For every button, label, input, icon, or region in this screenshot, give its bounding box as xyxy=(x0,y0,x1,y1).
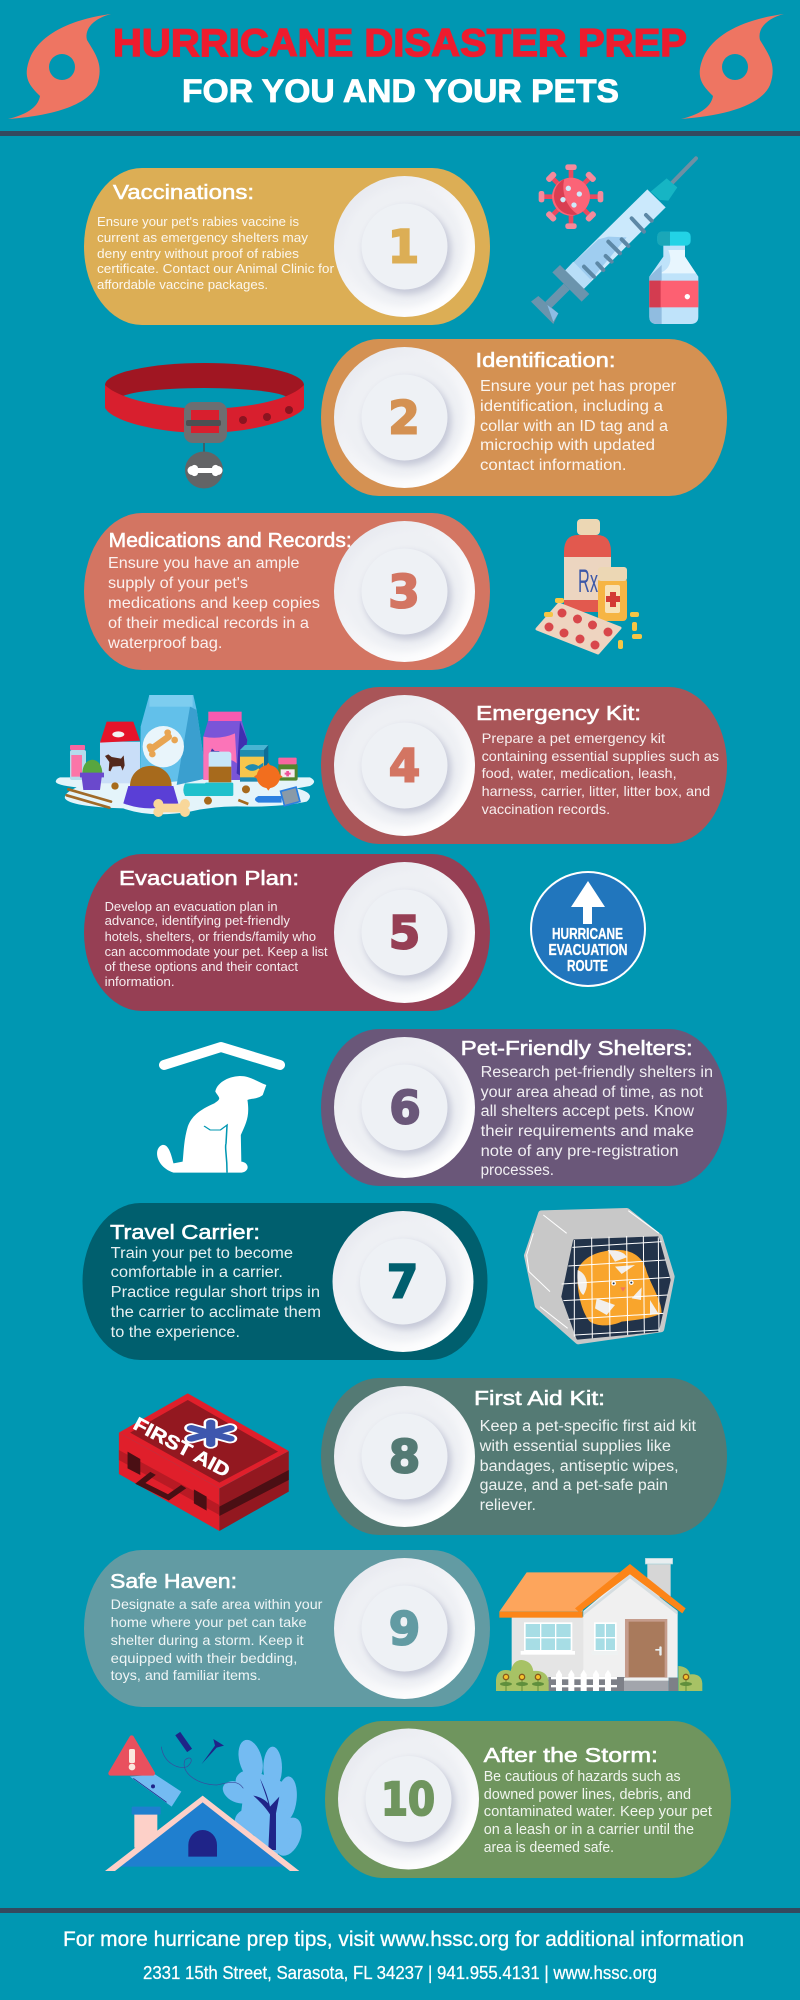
syringe xyxy=(672,158,696,183)
body text: downed power lines, debris, and xyxy=(484,1786,691,1803)
windows xyxy=(524,1622,572,1652)
heading: Travel Carrier: xyxy=(110,1222,260,1244)
body text: can accommodate your pet. Keep a list xyxy=(105,944,328,959)
body text: reliever. xyxy=(480,1497,536,1514)
grass pot xyxy=(82,760,102,774)
icon: hurricane evacuation route sign xyxy=(530,871,646,987)
body text: of their medical records in a xyxy=(108,615,309,632)
body text: information. xyxy=(105,974,175,989)
icon: hurricane left xyxy=(8,14,111,119)
icon: storm damaged house xyxy=(105,1732,307,1871)
body text: certificate. Contact our Animal Clinic for xyxy=(97,261,335,276)
body text: of these options and their contact xyxy=(105,959,298,974)
water bowls and dispenser xyxy=(183,783,207,796)
body text: Ensure your pet has proper xyxy=(480,378,676,395)
number 6: 6 xyxy=(389,1082,421,1134)
comb and plunger debris xyxy=(175,1732,192,1752)
icon: medicine bottles and pills: Rx xyxy=(578,563,598,599)
number 5: 5 xyxy=(389,906,420,960)
virus xyxy=(539,164,603,229)
wire xyxy=(161,1747,243,1788)
fence xyxy=(551,1670,617,1691)
icon: house xyxy=(496,1558,702,1691)
footer call to action: For more hurricane prep tips, visit www.hssc.org for additional information xyxy=(63,1928,744,1951)
sticks xyxy=(67,789,111,808)
panel: pet-friendly shelters xyxy=(321,1029,727,1186)
heading: Identification: xyxy=(476,350,616,372)
title: HURRICANE DISASTER PREP xyxy=(113,22,687,65)
number 10: 10 xyxy=(381,1773,435,1826)
panel: identification xyxy=(321,339,727,496)
body text: supply of your pet's xyxy=(108,575,248,592)
number 3: 3 xyxy=(388,566,420,618)
body text: equipped with their bedding, xyxy=(111,1650,297,1666)
body text xyxy=(482,730,719,817)
body text xyxy=(480,378,676,474)
body text: contaminated water. Keep your pet xyxy=(484,1803,713,1820)
body text xyxy=(97,214,335,292)
body text: harness, carrier, litter, litter box, and xyxy=(482,783,710,799)
body text: Ensure you have an ample xyxy=(108,555,300,572)
heading: Medications and Records: xyxy=(109,530,352,552)
heading: Evacuation Plan: xyxy=(119,868,299,890)
tree xyxy=(219,1737,307,1860)
food bowl xyxy=(130,766,172,788)
body text: containing essential supplies such as xyxy=(482,748,719,764)
body text xyxy=(107,555,320,652)
number 2: 2 xyxy=(388,392,420,444)
body text: deny entry without proof of rabies xyxy=(97,246,300,261)
body text: Keep a pet-specific first aid kit xyxy=(480,1418,697,1435)
roof xyxy=(120,1802,285,1867)
body text: Prepare a pet emergency kit xyxy=(482,730,665,746)
chimney xyxy=(134,1814,157,1848)
body text xyxy=(111,1596,323,1683)
number 1: 1 xyxy=(388,220,419,274)
body text: microchip with updated xyxy=(480,437,655,454)
heading: Safe Haven: xyxy=(110,1571,237,1593)
body text: home where your pet can take xyxy=(111,1614,307,1630)
body text: Be cautious of hazards such as xyxy=(484,1768,681,1785)
icon: medicine bottles and pills xyxy=(537,519,642,653)
jar xyxy=(278,764,298,781)
panel: first aid kit xyxy=(321,1378,727,1535)
body text: affordable vaccine packages. xyxy=(97,277,268,292)
body text: waterproof bag. xyxy=(107,635,222,652)
panel: safe haven xyxy=(84,1550,490,1707)
body text: area is deemed safe. xyxy=(484,1839,614,1856)
body text: comfortable in a carrier. xyxy=(111,1264,283,1281)
small bottle xyxy=(70,750,86,780)
panel: medications and records xyxy=(84,513,490,670)
brush xyxy=(255,796,282,803)
warning triangle xyxy=(111,1738,153,1773)
door xyxy=(625,1619,667,1678)
body text: the carrier to acclimate them xyxy=(111,1304,321,1321)
body text: current as emergency shelters may xyxy=(97,230,309,245)
body text: Practice regular short trips in xyxy=(111,1284,320,1301)
body text: vaccination records. xyxy=(482,801,610,817)
treats box xyxy=(240,750,264,782)
number 7: 7 xyxy=(387,1256,418,1308)
heading: Pet-Friendly Shelters: xyxy=(461,1038,693,1060)
icon: hurricane evacuation route sign: EVACUATION xyxy=(548,942,628,959)
body text: all shelters accept pets. Know xyxy=(481,1103,695,1120)
body text: Develop an evacuation plan in xyxy=(105,899,278,914)
body text xyxy=(105,899,328,989)
subtitle: FOR YOU AND YOUR PETS xyxy=(182,73,619,109)
body text: your area ahead of time, as not xyxy=(481,1084,704,1101)
body text: their requirements and make xyxy=(481,1123,694,1140)
body text: bandages, antiseptic wipes, xyxy=(480,1458,679,1475)
body text: identification, including a xyxy=(480,398,663,415)
icon: first aid case xyxy=(119,1393,289,1531)
body text: food, water, medication, leash, xyxy=(482,765,677,781)
body text: shelter during a storm. Keep it xyxy=(111,1632,304,1648)
body text: medications and keep copies xyxy=(108,595,320,612)
number 8: 8 xyxy=(389,1430,420,1484)
icon: hurricane evacuation route sign: ROUTE xyxy=(567,958,608,975)
body text: hotels, shelters, or friends/family who xyxy=(105,929,316,944)
bushes xyxy=(496,1660,702,1691)
body text xyxy=(111,1245,321,1341)
header xyxy=(8,14,784,119)
body text xyxy=(484,1768,713,1856)
icon: pet carrier with cat xyxy=(527,1211,671,1341)
footer contact details: 2331 15th Street, Sarasota, FL 34237 | 941.955.4131 | www.hssc.org xyxy=(143,1963,657,1983)
bone xyxy=(160,795,183,821)
number 4: 4 xyxy=(389,740,420,792)
number 9: 9 xyxy=(389,1602,420,1656)
body text: Train your pet to become xyxy=(111,1245,293,1262)
body text: on a leash or in a carrier until the xyxy=(484,1821,694,1838)
panel: vaccinations xyxy=(84,168,490,325)
body text: Research pet-friendly shelters in xyxy=(481,1064,713,1081)
body text: toys, and familiar items. xyxy=(111,1667,261,1683)
heading: After the Storm: xyxy=(484,1745,658,1767)
ball xyxy=(257,765,280,788)
body text: note of any pre-registration xyxy=(481,1143,679,1160)
milk carton bag xyxy=(100,742,140,783)
panel: emergency kit xyxy=(321,687,727,844)
body text: with essential supplies like xyxy=(479,1438,671,1455)
icon: first aid case: FIRST AID xyxy=(130,1414,233,1482)
body text: to the experience. xyxy=(111,1324,240,1341)
body text xyxy=(479,1418,697,1514)
panel: travel carrier xyxy=(82,1203,488,1360)
steps and ground xyxy=(548,1677,625,1691)
body text: processes. xyxy=(481,1162,554,1179)
panel: after the storm xyxy=(325,1721,731,1878)
heading: Vaccinations: xyxy=(113,182,254,204)
purple bag xyxy=(203,720,247,780)
body text: advance, identifying pet-friendly xyxy=(105,913,290,928)
vial xyxy=(649,245,698,324)
body text: gauze, and a pet-safe pain xyxy=(480,1477,668,1494)
body text xyxy=(481,1064,713,1179)
kibble xyxy=(111,782,250,805)
body text: collar with an ID tag and a xyxy=(480,418,668,435)
icon: hurricane right xyxy=(681,14,784,119)
body text: Designate a safe area within your xyxy=(111,1596,323,1612)
body text: contact information. xyxy=(480,457,626,474)
icon: syringe, virus and vial xyxy=(531,158,698,324)
icon: red collar with bone tag xyxy=(105,363,304,488)
icon: dog and cat under roof xyxy=(157,1047,280,1173)
heading: First Aid Kit: xyxy=(474,1388,605,1410)
panel: evacuation plan xyxy=(84,854,490,1011)
footer xyxy=(63,1928,744,1983)
heading: Emergency Kit: xyxy=(476,703,641,725)
icon: pet supplies xyxy=(56,695,314,817)
plank sign xyxy=(130,1774,181,1807)
icon: hurricane evacuation route sign: HURRICANE xyxy=(552,926,623,943)
body text: Ensure your pet's rabies vaccine is xyxy=(97,214,300,229)
large food bag xyxy=(140,695,207,785)
